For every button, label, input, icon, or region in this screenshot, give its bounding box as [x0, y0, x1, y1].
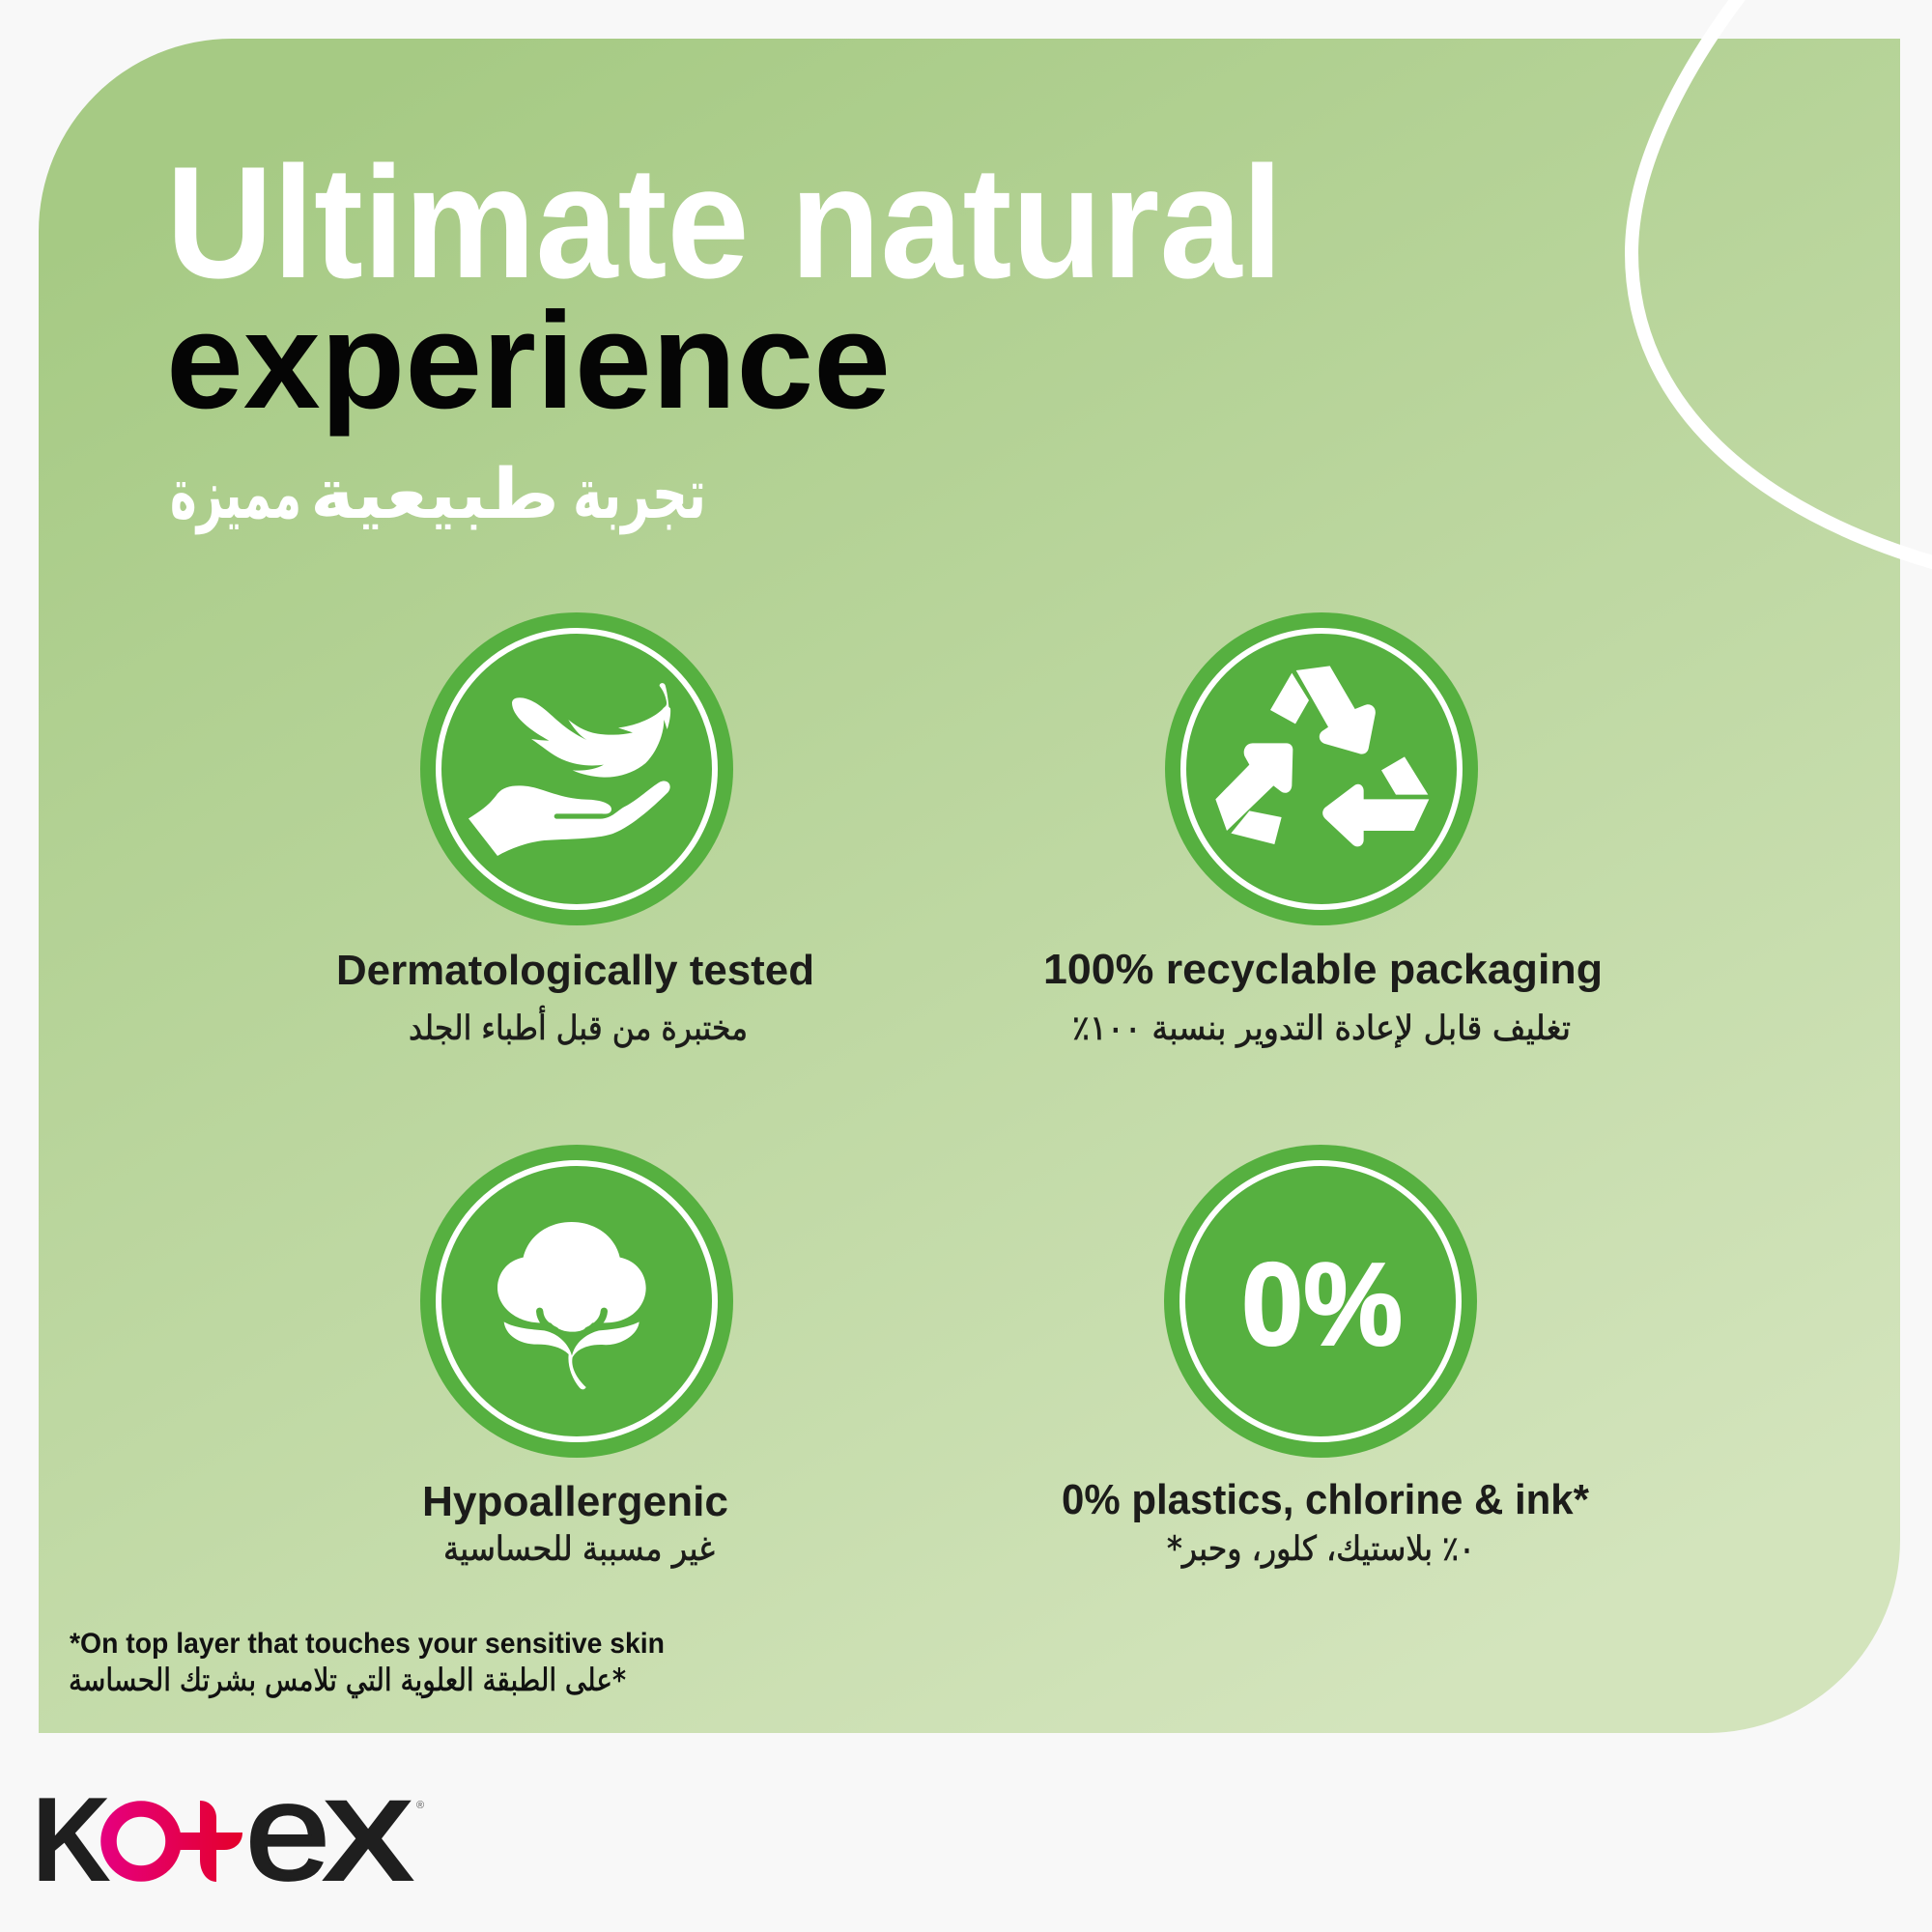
label: hypoallergenic: Hypoallergenic: [422, 1478, 728, 1525]
Arabic label: hypoallergenic: غير مسببة للحساسية: [443, 1530, 715, 1569]
title line 1: Ultimate natural: [166, 133, 1283, 311]
Arabic label: zero plastics: ٠٪ بلاستيك، كلور، وحبر*: [1167, 1530, 1475, 1569]
feature: dermatologically tested: [336, 612, 814, 1048]
feature: zero plastics: [1062, 1145, 1590, 1569]
logo letters e and x: [245, 1755, 415, 1909]
footnote: [69, 1628, 665, 1698]
label: dermatologically tested: Dermatologically tested: [336, 947, 814, 994]
logo letters e and x: e: [245, 1755, 330, 1909]
logo letter K: K: [32, 1774, 111, 1907]
title line 2: experience: [166, 284, 891, 438]
footnote Arabic: *على الطبقة العلوية التي تلامس بشرتك الحساسة: [69, 1662, 626, 1698]
label: recyclable packaging: 100% recyclable packaging: [1043, 946, 1603, 993]
icon: zero percent: 0%: [1241, 1238, 1403, 1370]
Arabic subtitle: طبيعية: [310, 453, 559, 534]
icon: cotton flower: [420, 1145, 733, 1458]
title: [166, 133, 1283, 438]
icon: recycling arrows: [1165, 612, 1478, 925]
label: zero plastics: 0% plastics, chlorine & ink*: [1062, 1476, 1590, 1523]
icon: zero percent: [1164, 1145, 1477, 1458]
Arabic subtitle: [170, 453, 706, 535]
Arabic label: dermatologically tested: مختبرة من قبل أطباء الجلد: [409, 1006, 748, 1048]
Arabic subtitle: مميزة: [170, 453, 301, 535]
feature: hypoallergenic: [420, 1145, 733, 1569]
registered mark: ®: [416, 1800, 424, 1811]
logo letters e and x: X: [321, 1775, 415, 1906]
logo letter o with plus: [108, 1801, 242, 1882]
icon: feather over hand: [420, 612, 733, 925]
feature: recyclable packaging: [1043, 612, 1603, 1048]
footnote English: *On top layer that touches your sensitive skin: [70, 1628, 665, 1660]
Arabic subtitle: تجربة: [573, 453, 706, 535]
logo: Kotex: [32, 1755, 424, 1909]
decorative white curve: [1632, 0, 1932, 563]
Arabic label: recyclable packaging: تغليف قابل لإعادة التدوير بنسبة ١٠٠٪: [1072, 1009, 1571, 1048]
